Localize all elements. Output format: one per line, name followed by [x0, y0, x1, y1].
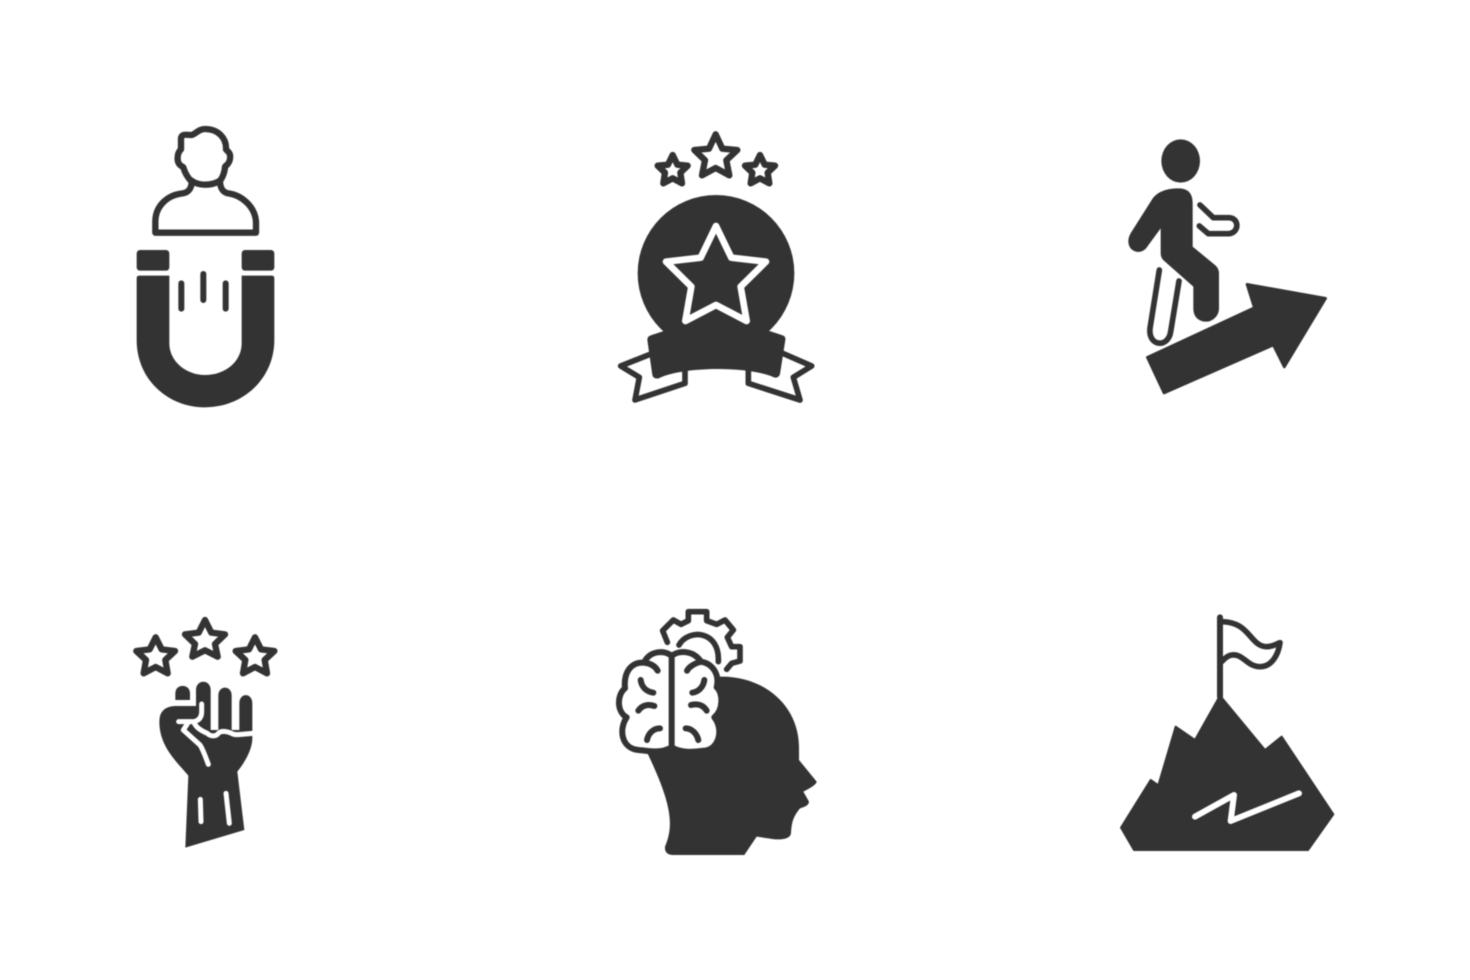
thumb tip	[175, 686, 190, 700]
arrow	[1147, 284, 1326, 393]
body	[1128, 188, 1219, 322]
icon: head with brain and gear	[619, 612, 817, 855]
fist and forearm	[159, 682, 252, 848]
three stars	[136, 620, 274, 673]
icon: award badge with stars	[621, 134, 812, 400]
head silhouette	[647, 677, 817, 855]
brain	[619, 652, 721, 752]
icon: person attracted by magnet	[137, 129, 274, 407]
crack line	[1195, 793, 1299, 821]
flag	[1222, 622, 1280, 667]
gear outline	[663, 612, 740, 669]
ribbon band	[647, 331, 785, 379]
icon: person climbing an arrow	[1128, 139, 1326, 393]
medal disc	[638, 195, 794, 352]
finger and thumb creases	[179, 704, 252, 823]
head	[1161, 139, 1200, 183]
ribbon tails	[621, 353, 812, 400]
mountain	[1121, 696, 1333, 850]
icon: mountain with flag	[1121, 617, 1333, 850]
three stars	[658, 134, 775, 183]
flag pole	[1211, 617, 1229, 697]
person outline	[155, 129, 256, 233]
badge star	[666, 226, 766, 321]
magnet	[137, 250, 274, 407]
outlined back leg	[1150, 270, 1179, 343]
outlined arm	[1199, 205, 1237, 234]
icon: raised fist with stars	[136, 620, 274, 848]
